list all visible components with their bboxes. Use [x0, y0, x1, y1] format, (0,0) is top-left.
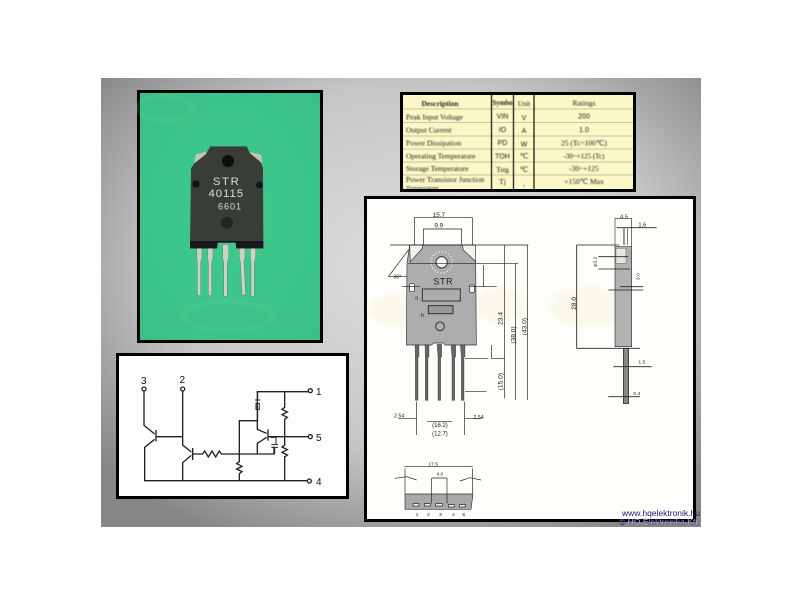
table text: Peak Input Voltage: [406, 112, 463, 122]
side view labels: 0.4: [633, 391, 640, 397]
schematic wiring: [142, 387, 312, 483]
terminal numbers: 1: [316, 387, 322, 398]
table text: W: [521, 142, 528, 148]
side view: [571, 214, 657, 404]
icon: transistor package: [190, 146, 263, 296]
front view leads: [415, 344, 465, 400]
website credit: [619, 508, 700, 527]
side view labels: 3.0: [635, 273, 641, 280]
table text: -30~+125: [569, 164, 599, 173]
table text: VIN: [497, 114, 508, 120]
terminal numbers: 5: [316, 433, 322, 444]
front view: [388, 212, 528, 438]
front view labels: STR: [433, 276, 453, 286]
table text: 200: [578, 114, 590, 120]
side view labels: 4.5: [620, 214, 628, 220]
table text: Output Current: [406, 126, 453, 134]
bottom view labels: 1: [416, 512, 419, 518]
table text: 25 (Tc=100℃): [561, 138, 607, 148]
side view labels: 1.5: [638, 359, 645, 365]
front view labels: 2.54: [394, 414, 404, 420]
bottom view labels: 5: [462, 512, 465, 518]
front view labels: b: [421, 313, 424, 319]
side view labels: φ3.2: [593, 256, 599, 267]
table text: A: [522, 128, 527, 135]
bottom view package: [405, 494, 473, 509]
front view labels: (12.7): [432, 432, 448, 438]
front view labels: (15.0): [497, 373, 504, 390]
table text: PD: [498, 140, 507, 147]
icon: transistor package: 40115: [208, 188, 244, 200]
table text: -30~+125 (Tc): [564, 152, 605, 160]
front view dimension lines: [388, 218, 528, 435]
terminal numbers: 3: [141, 376, 147, 387]
drawing watermarks: [368, 287, 626, 327]
table text: Description: [421, 99, 459, 108]
table text: TOH: [495, 154, 510, 160]
front view labels: (16.2): [432, 423, 448, 429]
panel: ratings table: [401, 93, 635, 192]
table text: 1.0: [579, 127, 589, 134]
side view labels: 1.6: [638, 223, 646, 229]
gray background panel: [101, 78, 701, 527]
front view labels: 2.54: [473, 415, 484, 421]
table text: Temperature: [406, 185, 439, 192]
table text: Tstg: [496, 165, 509, 174]
front view labels: 36°: [393, 274, 401, 280]
front view labels: [393, 212, 528, 438]
table text: ,: [523, 179, 525, 188]
table text: [406, 98, 607, 192]
bottom view labels: [416, 462, 465, 518]
bottom view labels: 2: [427, 512, 430, 518]
table text: IO: [499, 127, 507, 134]
table text: ℃: [520, 165, 529, 174]
table text: Unit: [518, 100, 530, 108]
bottom view labels: 4: [452, 512, 455, 518]
terminal numbers: 4: [316, 477, 322, 488]
table text: Tj: [499, 177, 506, 186]
table column lines: [492, 95, 534, 189]
side view dimension lines: [577, 228, 657, 397]
front view package: [406, 245, 476, 345]
table text: ℃: [520, 152, 529, 160]
front view labels: (38.0): [511, 326, 518, 344]
metal tab corners: [194, 152, 207, 162]
panel: component photo: [137, 92, 322, 342]
bottom view: [395, 462, 481, 518]
bottom view labels: 3: [439, 512, 442, 518]
side view labels: 28.0: [571, 297, 578, 310]
panel: circuit schematic: [118, 354, 348, 498]
front view labels: 9.9: [434, 222, 444, 229]
table text: Storage Temperature: [406, 164, 469, 173]
table row lines: [403, 109, 633, 175]
table text: +150℃ Max: [564, 177, 604, 186]
side view package: [615, 247, 632, 347]
panel: mechanical drawing: [366, 198, 694, 520]
bottom view dimension lines: [395, 467, 481, 503]
table text: Operating Temperature: [406, 152, 476, 160]
front view labels: 23.4: [497, 312, 504, 325]
package body: [190, 146, 263, 248]
photo watermark: [137, 96, 274, 330]
table text: Power Dissipation: [406, 138, 461, 148]
metal leads: [197, 244, 256, 296]
table text: Symbo: [492, 99, 513, 107]
icon: transistor package: 6601: [218, 202, 242, 212]
front view labels: a: [415, 296, 418, 302]
table text: Power Transistor Junction: [406, 175, 485, 184]
website credit: © HQ Elektronika Kft.: [619, 517, 700, 527]
package marking: STR: [213, 176, 240, 188]
table text: V: [522, 115, 527, 122]
front view labels: (43.0): [521, 318, 528, 335]
table text: Ratings: [573, 98, 596, 108]
side view labels: [571, 214, 646, 397]
terminal numbers: 2: [180, 375, 186, 386]
holes: [222, 155, 234, 167]
bottom view labels: 17.5: [428, 462, 438, 468]
website credit: www.hqelektronik.hu: [621, 508, 700, 518]
bottom view labels: 4.0: [437, 471, 444, 476]
terminal numbers: [141, 375, 322, 488]
front view labels: 15.7: [433, 212, 445, 219]
